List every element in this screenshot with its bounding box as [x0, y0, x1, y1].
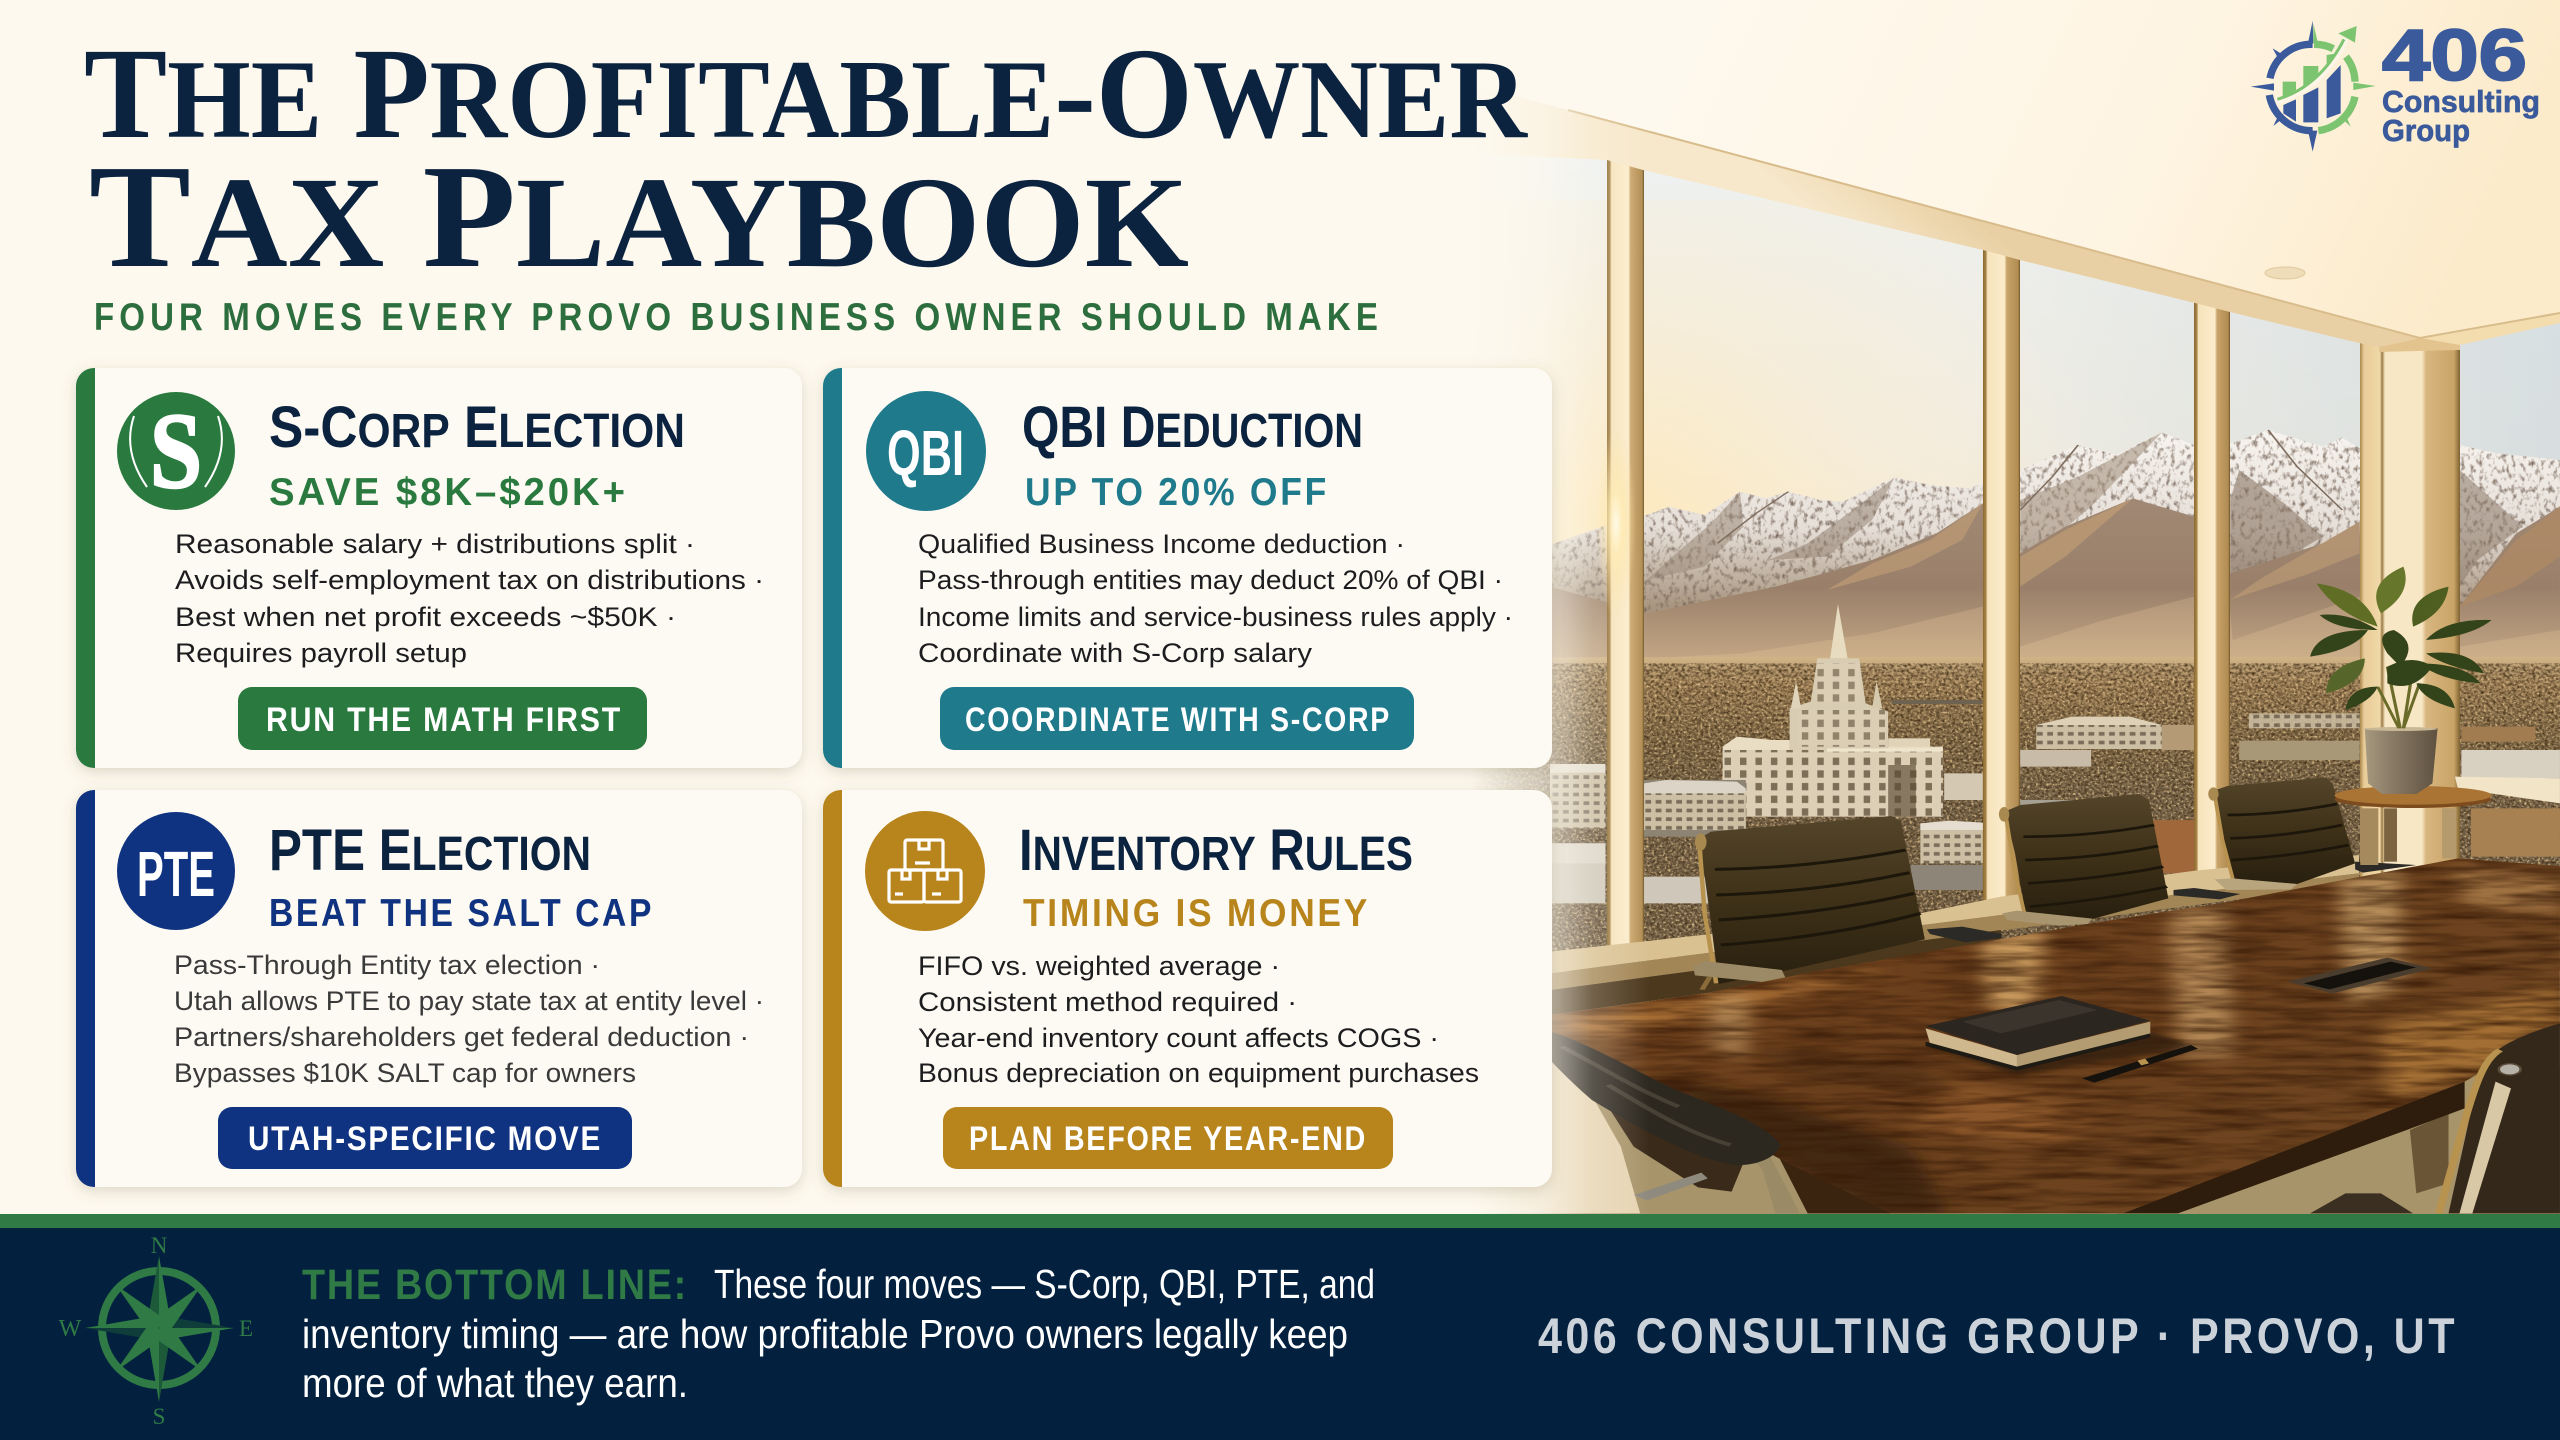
- plant on side table: [2310, 567, 2492, 794]
- ceiling: [1522, 0, 2560, 352]
- sky: [1543, 158, 2560, 544]
- power outlet: [2287, 958, 2432, 993]
- button: PLAN BEFORE YEAR-END: [969, 1120, 1367, 1158]
- icon: PTE badge: [117, 812, 235, 930]
- title: [84, 22, 1528, 299]
- mountains and valley: [1408, 430, 2560, 971]
- front left chair: [1497, 1032, 1800, 1214]
- logo mark: compass and growth chart: [2251, 21, 2376, 152]
- icon: QBI badge: [866, 391, 986, 511]
- bottom line message: inventory timing — are how profitable Provo owners legally keep: [302, 1311, 1348, 1357]
- panel: PTE Election: [76, 790, 802, 1187]
- title: THE PROFITABLE-OWNER: [84, 22, 1528, 166]
- icon: compass rose: S: [153, 1404, 165, 1429]
- card body: [823, 368, 1552, 768]
- logo: 406 Consulting Group: [2251, 16, 2540, 152]
- button: UTAH-SPECIFIC MOVE: [248, 1120, 602, 1158]
- body copy: [918, 529, 1513, 668]
- body copy: Consistent method required ·: [918, 987, 1297, 1017]
- body copy: FIFO vs. weighted average ·: [918, 951, 1280, 981]
- snow-capped far range: [1552, 430, 2560, 626]
- button: [238, 687, 647, 750]
- bottom line message: [302, 1261, 1375, 1406]
- window sills: [1552, 776, 2560, 1015]
- body copy: [918, 951, 1479, 1088]
- icon: compass rose: W: [59, 1316, 82, 1342]
- body copy: Pass-through entities may deduct 20% of QBI ·: [918, 565, 1503, 595]
- body copy: Qualified Business Income deduction ·: [918, 529, 1405, 559]
- body copy: [175, 529, 764, 668]
- window mullions: [1596, 150, 2230, 952]
- bottom line message: more of what they earn.: [302, 1360, 688, 1406]
- icon: compass rose: E: [239, 1316, 253, 1341]
- photo fade into cream: [1400, 0, 1650, 1216]
- card body: [76, 368, 802, 768]
- conference table: [1473, 853, 2560, 1217]
- bottom line message: These four moves — S-Corp, QBI, PTE, and: [714, 1261, 1375, 1307]
- notebook and pen: [1926, 996, 2198, 1083]
- subtitle: FOUR MOVES EVERY PROVO BUSINESS OWNER SHOULD MAKE: [94, 296, 1383, 339]
- icon: S badge: S: [150, 392, 202, 511]
- body copy: Reasonable salary + distributions split ·: [175, 529, 695, 559]
- body copy: Bonus depreciation on equipment purchases: [918, 1058, 1479, 1088]
- navy band: [0, 1228, 2560, 1440]
- back chair 1: [1693, 816, 2002, 990]
- low roofs: [1644, 780, 1746, 837]
- savings line: BEAT THE SALT CAP: [269, 892, 654, 935]
- green stripe: [0, 1214, 2560, 1228]
- button: [940, 687, 1414, 750]
- panel: Inventory Rules: [823, 790, 1552, 1187]
- accent bar: [823, 790, 842, 1187]
- heading: S-CORP ELECTION: [269, 395, 685, 460]
- plant stems: [2378, 667, 2420, 728]
- title: TAX PLAYBOOK: [89, 135, 1189, 299]
- panel: QBI Deduction: [823, 368, 1552, 768]
- heading: QBI DEDUCTION: [1022, 395, 1363, 460]
- foothills: [1680, 596, 2560, 658]
- button: [218, 1107, 632, 1169]
- icon: QBI badge: QBI: [887, 417, 964, 489]
- heading: INVENTORY RULES: [1019, 818, 1413, 883]
- logo text Group: Group: [2382, 113, 2470, 148]
- button: [943, 1107, 1393, 1169]
- icon: compass rose: [59, 1233, 253, 1429]
- body copy: Bypasses $10K SALT cap for owners: [174, 1058, 636, 1088]
- body copy: Pass-Through Entity tax election ·: [174, 950, 600, 980]
- body copy: Best when net profit exceeds ~$50K ·: [175, 602, 676, 632]
- accent bar: [823, 368, 842, 768]
- logo text Consulting: Consulting: [2382, 84, 2540, 119]
- savings line: SAVE $8K–$20K+: [269, 471, 628, 514]
- plant pot: [2365, 727, 2438, 794]
- back chair 3: [2208, 777, 2416, 890]
- near rooftops: [1550, 793, 2560, 903]
- floor: [1408, 1067, 2560, 1217]
- body copy: Requires payroll setup: [175, 638, 467, 668]
- body copy: Partners/shareholders get federal deduction ·: [174, 1022, 749, 1052]
- front right chair: [2439, 1023, 2560, 1213]
- body copy: Income limits and service-business rules apply ·: [918, 602, 1513, 632]
- button: COORDINATE WITH S-CORP: [965, 701, 1391, 739]
- heading: PTE ELECTION: [269, 818, 591, 883]
- body copy: Utah allows PTE to pay state tax at entity level ·: [174, 986, 764, 1016]
- savings line: UP TO 20% OFF: [1025, 471, 1329, 514]
- body copy: [174, 950, 764, 1088]
- logo text 406: 406: [2382, 16, 2527, 96]
- body copy: Coordinate with S-Corp salary: [918, 638, 1313, 668]
- back chair 2: [1999, 794, 2240, 926]
- bottom line message: THE BOTTOM LINE:: [302, 1261, 688, 1309]
- conference furniture: [1408, 777, 2560, 1217]
- card body: [76, 790, 802, 1187]
- side table: [2335, 786, 2492, 865]
- panel: S-Corp Election: [76, 368, 802, 768]
- icon: stacked boxes: [865, 811, 985, 931]
- icon: S badge: [117, 392, 235, 511]
- button: RUN THE MATH FIRST: [266, 701, 622, 739]
- icon: compass rose: N: [151, 1233, 168, 1258]
- accent bar: [76, 790, 95, 1187]
- body copy: Year-end inventory count affects COGS ·: [918, 1023, 1439, 1053]
- temple landmark: [1723, 604, 1943, 817]
- photo: boardroom with mountain view: [1400, 0, 2560, 1217]
- savings line: TIMING IS MONEY: [1023, 892, 1370, 935]
- valley city: [1408, 657, 2560, 971]
- plant leaves: [2310, 567, 2492, 710]
- body copy: Avoids self-employment tax on distributions ·: [175, 565, 764, 595]
- accent bar: [76, 368, 95, 768]
- structural column: [2360, 340, 2460, 880]
- footer band: [0, 1214, 2560, 1440]
- card body: [823, 790, 1552, 1187]
- brown front range: [1552, 498, 2560, 658]
- icon: PTE badge: PTE: [137, 838, 215, 910]
- mid-distance buildings: [1550, 700, 2560, 828]
